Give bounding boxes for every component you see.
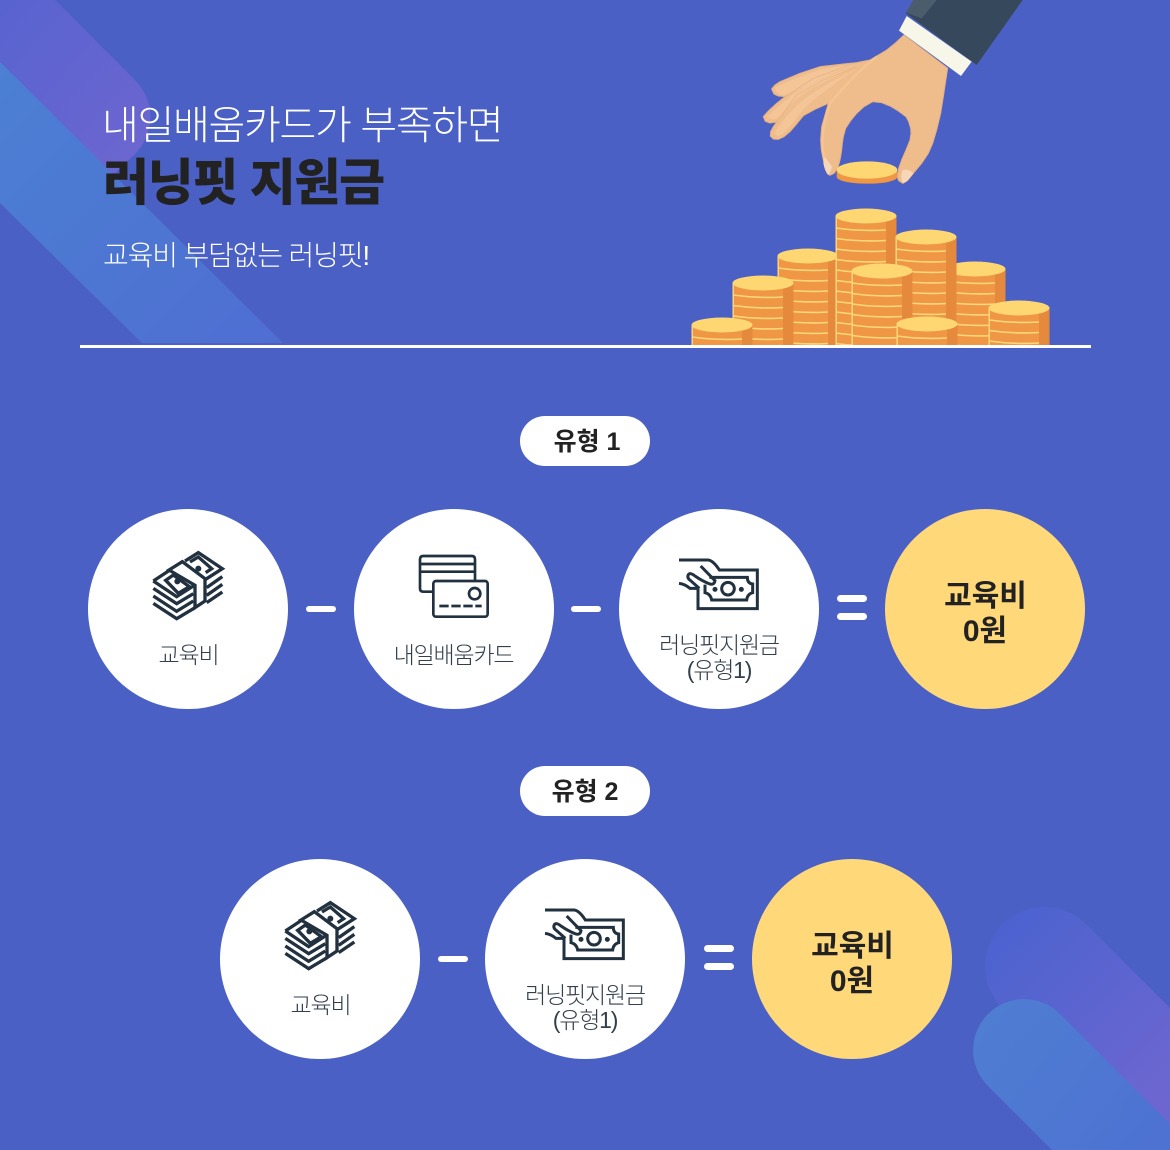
sleeve [906, 0, 1023, 65]
circle: tomorrow learning card [354, 509, 554, 709]
decoration: bottom-right capsule bands [973, 907, 1170, 1150]
minus sign [306, 606, 336, 612]
pill: type 1 [520, 416, 650, 466]
minus sign [571, 606, 601, 612]
decoration: top-left diagonal bands [0, 0, 283, 343]
illustration: coin stacks [692, 208, 1050, 345]
circle: tuition [88, 509, 288, 709]
row: type 2 formula [220, 859, 952, 1059]
icon: hand with banknote [679, 560, 757, 609]
pill: type 2: 유형 2 [552, 778, 618, 806]
circle: result [752, 859, 952, 1059]
hand [763, 35, 948, 183]
equals sign [704, 945, 734, 970]
coin held [837, 172, 897, 184]
label: 러닝핏지원금 [525, 982, 645, 1008]
circle: tuition [220, 859, 420, 1059]
circle: running fit support: (유형1) [687, 657, 752, 683]
row: type 1 formula [88, 509, 1085, 709]
equals sign [837, 595, 867, 620]
pill: type 2 [520, 766, 650, 816]
divider line [80, 345, 1091, 348]
label: 교육비 [159, 642, 218, 668]
title: main heading: 러닝핏 지원금 [103, 155, 384, 211]
circle: running fit support [485, 859, 685, 1059]
circle: result: 0원 [830, 965, 874, 998]
text: tagline: 교육비 부담없는 러닝핏! [103, 240, 369, 271]
illustration: hand holding a coin [763, 0, 1023, 184]
minus sign [438, 956, 468, 962]
icon: credit cards [420, 556, 488, 617]
title: subheading: 내일배움카드가 부족하면 [102, 104, 502, 148]
label: 러닝핏지원금 [659, 632, 779, 658]
icon: money stack [153, 553, 222, 619]
label: 내일배움카드 [394, 642, 513, 668]
circle: result: 교육비 [811, 930, 894, 963]
pill: type 1: 유형 1 [554, 428, 621, 456]
circle: result [885, 509, 1085, 709]
circle: running fit support [619, 509, 819, 709]
label: 교육비 [291, 992, 350, 1018]
circle: result: 교육비 [944, 580, 1027, 613]
icon: hand with banknote [545, 910, 623, 959]
icon: money stack [285, 903, 354, 969]
circle: running fit support: (유형1) [553, 1007, 618, 1033]
circle: result: 0원 [963, 615, 1007, 648]
cuff [899, 16, 972, 76]
